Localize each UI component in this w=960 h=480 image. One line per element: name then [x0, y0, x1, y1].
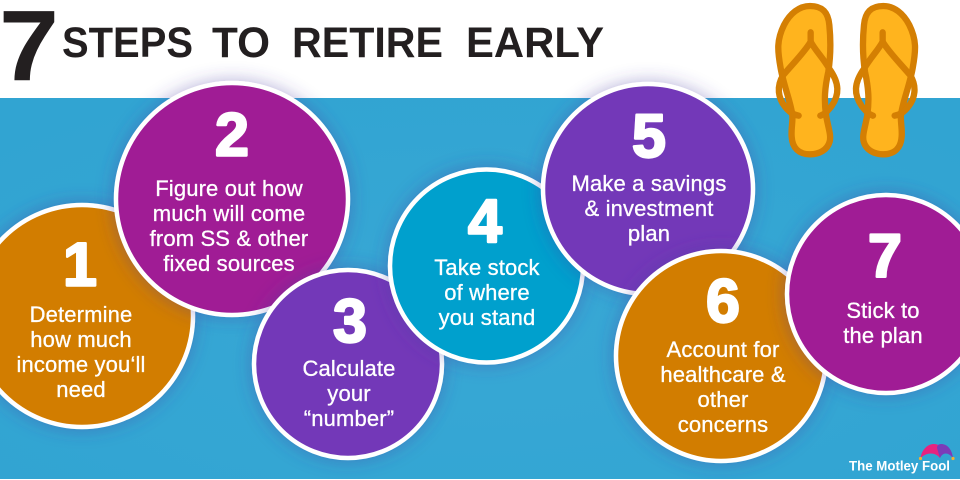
step 5 text: & investment — [585, 196, 713, 221]
title text: EARLY — [466, 19, 604, 67]
step 4 — [390, 170, 583, 362]
number 1: 1 — [63, 230, 97, 298]
step 5 text: plan — [628, 221, 670, 246]
step 3 text: your — [327, 381, 371, 406]
step 1 text: how much — [30, 327, 132, 352]
icon: left flip flop — [778, 6, 837, 154]
title text: TO — [212, 19, 270, 67]
step 5 text: Make a savings — [572, 171, 726, 196]
step 5 — [543, 84, 753, 294]
step 4 text: you stand — [439, 305, 535, 330]
step 3 — [254, 270, 442, 458]
step 1 text: Determine — [30, 302, 132, 327]
number 4: 4 — [468, 187, 502, 255]
step 2 — [116, 83, 348, 315]
step 2 text: much will come — [153, 201, 305, 226]
number 5: 5 — [632, 102, 666, 170]
title — [0, 0, 604, 102]
number 6: 6 — [706, 267, 740, 335]
logo wordmark: The Motley Fool — [849, 458, 950, 474]
title text: RETIRE — [292, 19, 443, 67]
step 2 text: Figure out how — [155, 176, 303, 201]
step 7 text: the plan — [843, 323, 923, 348]
step 1 text: income you‘ll — [16, 352, 146, 377]
step 3 text: Calculate — [302, 356, 396, 381]
step 6 text: healthcare & — [660, 362, 786, 387]
step 7 — [787, 195, 960, 393]
step 1 text: need — [56, 377, 106, 402]
step 3 text: “number” — [304, 406, 394, 431]
step 6 text: concerns — [678, 412, 768, 437]
logo: The Motley Fool — [849, 444, 955, 474]
step 6 text: other — [698, 387, 748, 412]
icon: right flip flop — [856, 6, 915, 154]
background panel — [0, 98, 960, 479]
step 4 text: Take stock — [434, 255, 541, 280]
step 2 text: from SS & other — [150, 226, 308, 251]
number 3: 3 — [333, 287, 367, 355]
number 2: 2 — [215, 100, 249, 168]
step 6 — [616, 251, 826, 461]
step 6 text: Account for — [667, 337, 779, 362]
step 4 text: of where — [444, 280, 530, 305]
icon: jester hat — [919, 444, 955, 460]
step 2 text: fixed sources — [163, 251, 295, 276]
icon: flip flops — [778, 6, 915, 154]
title text — [62, 19, 604, 67]
step 1 — [0, 205, 193, 427]
number 7: 7 — [868, 222, 902, 290]
step 7 text: Stick to — [846, 298, 920, 323]
title text: STEPS — [62, 19, 193, 67]
